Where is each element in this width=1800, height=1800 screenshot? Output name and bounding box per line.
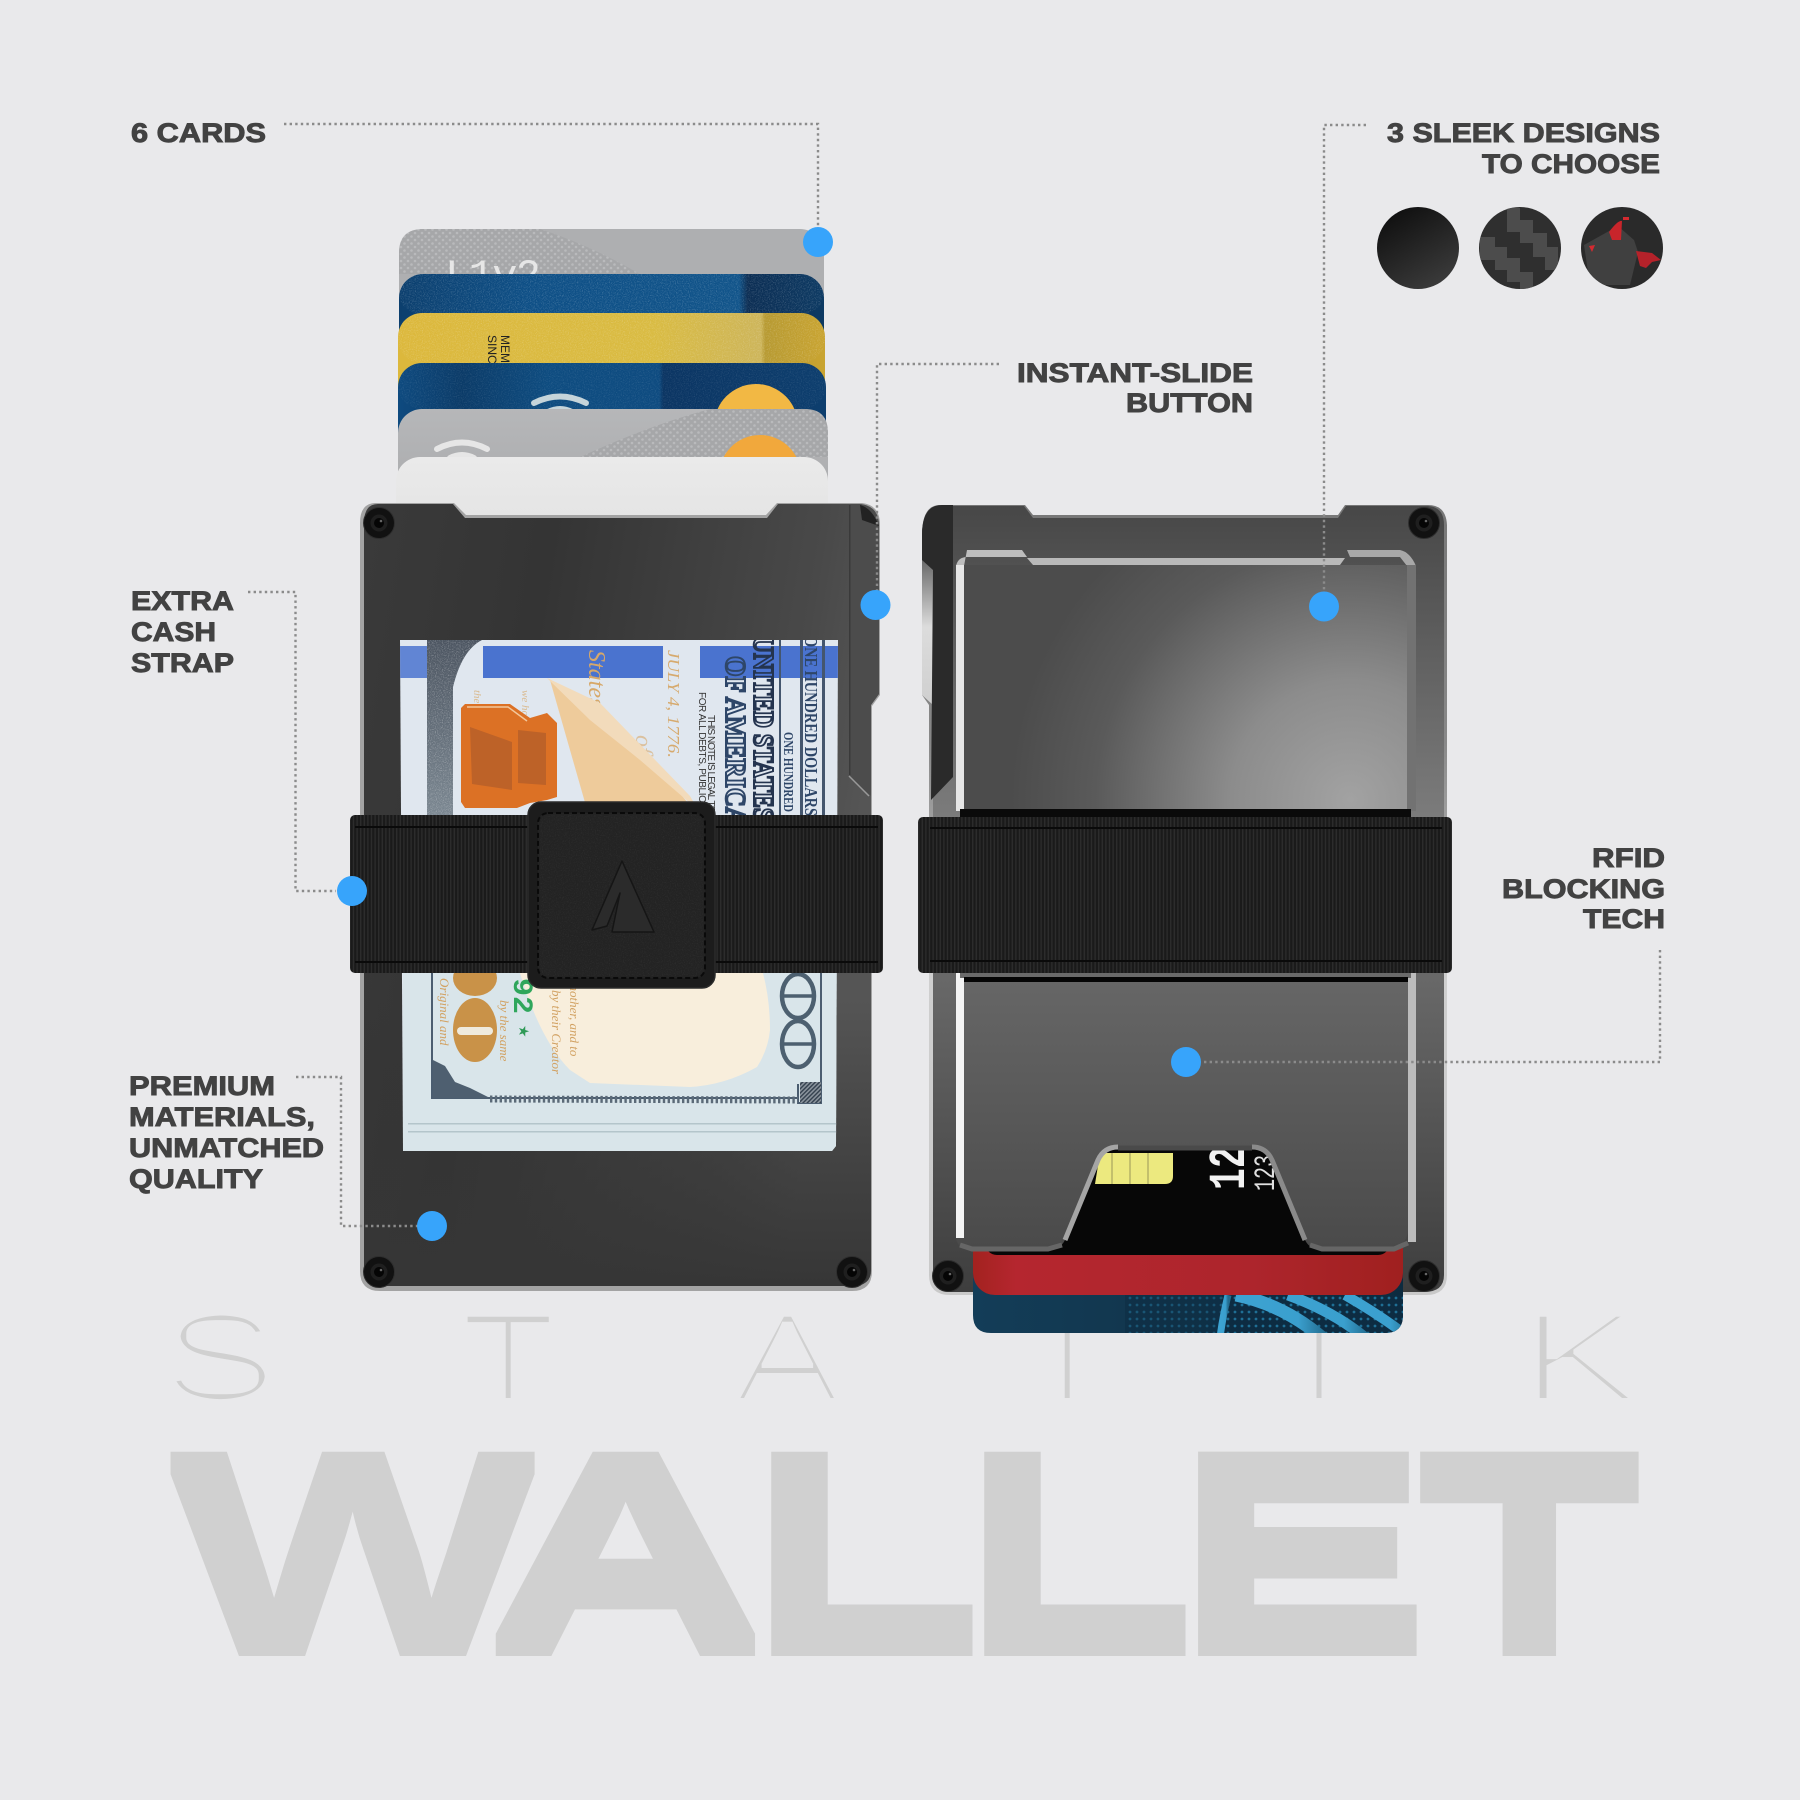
bill: orange seal [461, 704, 557, 808]
title: WALLET: A [486, 1406, 765, 1702]
label: rfid blocking tech: RFID [1592, 843, 1665, 873]
title: STATIK: K [1520, 1288, 1640, 1426]
card 6: white [396, 457, 828, 537]
card 2: blue [399, 274, 824, 364]
bill: script lettering: States [583, 650, 609, 707]
card 3: gold: MEMBER [498, 335, 512, 388]
bill: corner ornament [433, 1060, 490, 1098]
title: STATIK: T [459, 1289, 557, 1427]
title: STATIK: T [1018, 1289, 1116, 1427]
bill: vertical serif lettering: ONE HUNDRED [780, 732, 795, 812]
title: STATIK: A [733, 1288, 842, 1427]
bill: legal tender text: THIS NOTE IS LEGAL TENDER [705, 715, 716, 837]
card small number: 1234 [1249, 1143, 1283, 1191]
bill: vertical serif lettering: ONE HUNDRED DOLLARS [801, 636, 821, 816]
bill: right vertical rules [779, 640, 825, 820]
side button [922, 505, 953, 800]
title: WALLET: W [170, 1406, 539, 1702]
label: premium materials [129, 1071, 324, 1194]
lower slot shadow [960, 809, 1411, 818]
chip [1095, 1153, 1173, 1184]
bill: legal tender text: FOR ALL DEBTS, PUBLIC AND [696, 692, 707, 824]
card 1: silver: L1v2 [445, 253, 541, 301]
bill: left engraved border [427, 640, 482, 816]
icon: triangle logo [592, 861, 654, 932]
bill: corner hatch [800, 1082, 821, 1103]
bill: lower script [437, 978, 582, 1075]
label: rfid blocking tech [1502, 843, 1665, 934]
panel: right wallet (back) [918, 505, 1452, 1340]
swatch: matte black [1377, 207, 1459, 289]
card 5: silver with chip circle [398, 409, 828, 517]
red card [973, 1220, 1403, 1295]
bill: script lettering: we hold these truths [519, 690, 531, 778]
cash: hundred dollar bill [400, 636, 838, 1151]
bill: blue security band [400, 646, 838, 678]
leather patch with triangle logo [528, 802, 715, 988]
label: premium materials: PREMIUM [129, 1071, 275, 1101]
label: premium materials: MATERIALS, [129, 1102, 315, 1132]
elastic strap [350, 815, 883, 973]
label: rfid blocking tech: BLOCKING [1502, 874, 1665, 904]
bill: orange numeral slot [457, 1027, 493, 1035]
card number: 12 [1202, 1146, 1260, 1190]
slide button [849, 504, 879, 796]
bill: cream portrait oval [520, 973, 770, 1087]
label: extra cash strap: STRAP [131, 648, 234, 678]
bill: right 100 numerals [782, 974, 814, 1067]
bill: script lettering: of Huma [630, 735, 656, 818]
slot shadow under strap [960, 973, 1411, 982]
bill: frame [432, 973, 821, 1103]
bill: legal tender text [698, 692, 715, 810]
title: WALLET: E [1172, 1405, 1432, 1701]
wallet body [922, 505, 1447, 1295]
title: STATIK [162, 1287, 1640, 1427]
bill: peach shape [547, 678, 693, 802]
stack of six cards [396, 229, 828, 537]
recess frame highlights [956, 550, 1416, 811]
title: WALLET [170, 1405, 1643, 1702]
bill: lower script: by their Creator [549, 990, 564, 1075]
bill: stack edges [408, 1123, 838, 1132]
bill: lower background [832, 973, 837, 1151]
wallet body [360, 503, 880, 1291]
label: extra cash strap: EXTRA [131, 586, 234, 616]
card 3: gold: SINCE [485, 335, 499, 372]
bill: July date: JULY 4, 1776. [664, 650, 683, 758]
left edge highlight [922, 510, 933, 705]
bill: bottom zigzag [490, 1099, 798, 1100]
bill: lower script: by the same [497, 1000, 512, 1062]
label: 3 sleek designs [1387, 118, 1660, 179]
title: WALLET: L [745, 1405, 985, 1701]
screws [932, 508, 1440, 1292]
title: STATIK: I [1297, 1289, 1341, 1427]
upper plate [964, 565, 1407, 811]
bill: green star: ★ [515, 1025, 531, 1038]
bill: green serial: 92 [505, 978, 536, 1014]
callout dots [337, 227, 1339, 1241]
label: 3 sleek designs: 3 SLEEK DESIGNS [1387, 118, 1660, 148]
label: instant-slide button [1017, 358, 1253, 418]
label: instant-slide button: INSTANT-SLIDE [1017, 358, 1253, 388]
bill: script lettering: the thirteen united [471, 690, 483, 771]
screws [364, 508, 868, 1288]
card 3: gold [398, 313, 825, 413]
leader lines [248, 124, 1660, 1226]
black card with chip [985, 1130, 1390, 1255]
label: extra cash strap [131, 586, 234, 678]
bill: orange 100 numerals [453, 973, 497, 1062]
label: premium materials: UNMATCHED [129, 1133, 324, 1163]
label: rfid blocking tech: TECH [1583, 904, 1665, 934]
card 1: silver [399, 229, 824, 349]
bill: vertical serif lettering: UNITED STATES [747, 636, 778, 821]
bill: lower script: another, and to [567, 978, 582, 1057]
bill: script lettering [474, 650, 654, 756]
swatch: forged red [1580, 206, 1664, 290]
bill: vertical serif lettering: OF AMERICA [719, 656, 750, 827]
swatches: three designs [1377, 206, 1664, 290]
elastic strap [918, 817, 1452, 973]
teal card [973, 1274, 1403, 1333]
label: premium materials: QUALITY [129, 1164, 263, 1194]
label: extra cash strap: CASH [131, 617, 216, 647]
label: 6 cards: 6 CARDS [131, 118, 266, 148]
bill: vertical serif lettering [724, 640, 817, 815]
label: 3 sleek designs: TO CHOOSE [1482, 149, 1660, 179]
card 4: blue with chip circle [398, 363, 826, 468]
label: instant-slide button: BUTTON [1126, 388, 1253, 418]
lower plate with thumb cutout [956, 980, 1408, 1250]
swatch: carbon fibre [1478, 206, 1562, 290]
bill: lower script: Original and [437, 978, 452, 1046]
title: STATIK: S [162, 1287, 278, 1426]
title: WALLET: L [958, 1405, 1198, 1701]
title: WALLET: T [1416, 1406, 1643, 1702]
panel: left wallet (front, with cash strap) [350, 503, 883, 1291]
lower side rails [956, 972, 1416, 1242]
